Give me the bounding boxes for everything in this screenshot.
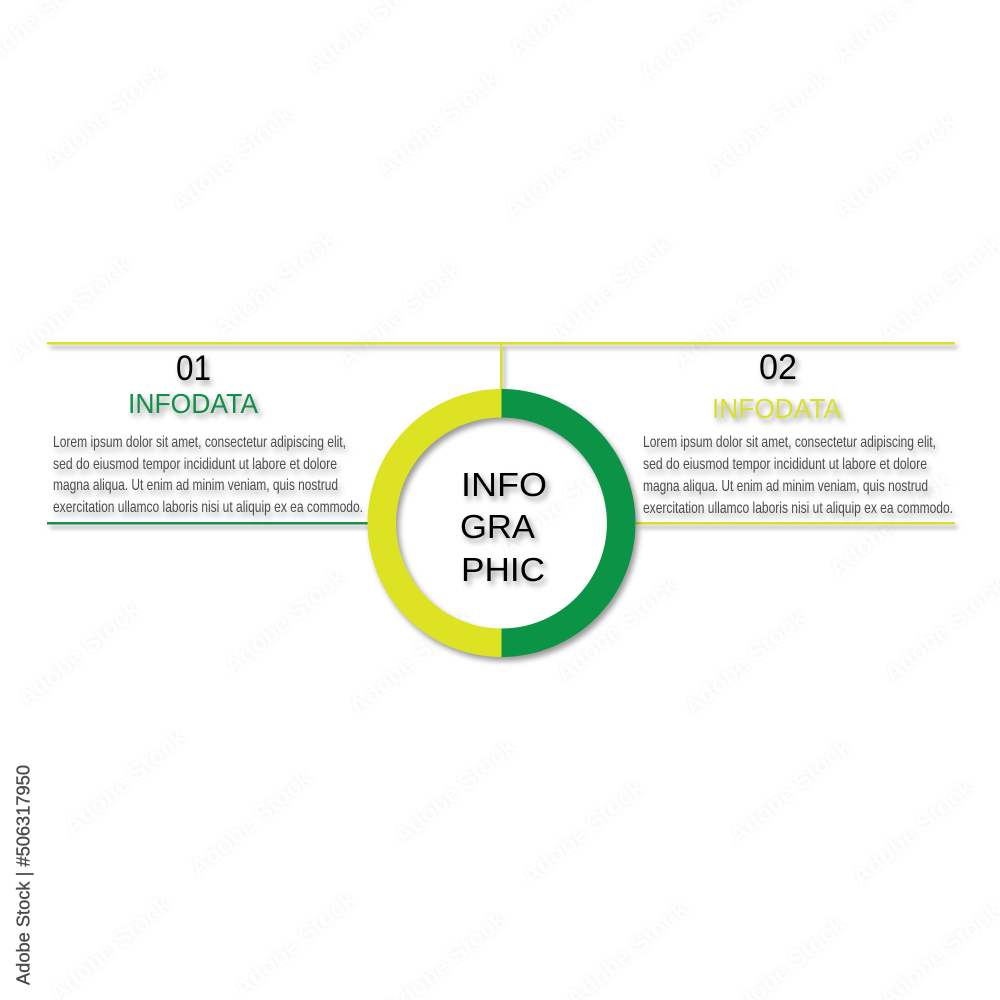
stock id caption: Adobe Stock | #506317950 — [14, 765, 34, 985]
heading 02: INFODATA — [712, 393, 841, 424]
number 01: 01 — [176, 349, 211, 388]
left bottom rule — [47, 522, 369, 524]
body text 01: magna aliqua. Ut enim ad minim veniam, quis nostrud — [53, 477, 338, 494]
watermark pattern: Adobe Stock — [551, 570, 684, 688]
panel: section 02 — [643, 348, 953, 517]
body text 01: exercitation ullamco laboris nisi ut aliquip ex ea commodo. — [53, 499, 363, 516]
watermark pattern: Adobe Stock — [229, 885, 362, 1000]
right bottom rule — [636, 522, 955, 524]
watermark pattern: Adobe Stock — [185, 764, 318, 882]
watermark pattern: Adobe Stock — [724, 732, 857, 850]
center title: PHIC — [461, 552, 545, 589]
watermark pattern: Adobe Stock — [4, 250, 137, 368]
watermark pattern: Adobe Stock — [499, 107, 632, 225]
watermark pattern: Adobe Stock — [372, 65, 505, 183]
body text 01: Lorem ipsum dolor sit amet, consectetur adipiscing elit, — [53, 434, 346, 451]
watermark pattern: Adobe Stock — [494, 445, 627, 563]
watermark pattern: Adobe Stock — [389, 732, 522, 850]
center title: GRA — [460, 509, 536, 546]
watermark pattern: Adobe Stock — [13, 595, 146, 713]
ring segment: green right half — [502, 389, 636, 657]
top connector line — [47, 342, 955, 390]
watermark pattern: Adobe Stock — [701, 65, 834, 183]
heading 01: INFODATA — [128, 388, 258, 419]
body text 02 — [643, 434, 953, 517]
center title — [460, 467, 547, 589]
watermark pattern: Adobe Stock — [219, 562, 352, 680]
watermark pattern: Adobe Stock — [544, 230, 677, 348]
watermark pattern: Adobe Stock — [829, 107, 962, 225]
watermark pattern: Adobe Stock — [679, 603, 812, 721]
watermark pattern: Adobe Stock — [166, 100, 299, 218]
body text 01: sed do eiusmod tempor incididunt ut labore et dolore — [53, 456, 337, 473]
watermark pattern: Adobe Stock — [344, 603, 477, 721]
watermark pattern: Adobe Stock — [209, 225, 342, 343]
watermark pattern: Adobe Stock — [847, 773, 980, 891]
watermark pattern: Adobe Stock — [39, 57, 172, 175]
panel: section 01 — [53, 349, 363, 516]
ring segment: yellow left half — [368, 389, 502, 657]
number 02: 02 — [759, 348, 797, 387]
watermark pattern: Adobe Stock — [874, 230, 1000, 348]
watermark pattern: Adobe Stock — [824, 465, 957, 583]
watermark pattern: Adobe Stock — [669, 255, 802, 373]
watermark pattern: Adobe Stock — [59, 723, 192, 841]
watermark pattern: Adobe Stock — [517, 773, 650, 891]
body text 01 — [53, 434, 363, 516]
watermark pattern: Adobe Stock — [334, 255, 467, 373]
center title: INFO — [461, 467, 547, 504]
donut ring — [368, 389, 636, 657]
